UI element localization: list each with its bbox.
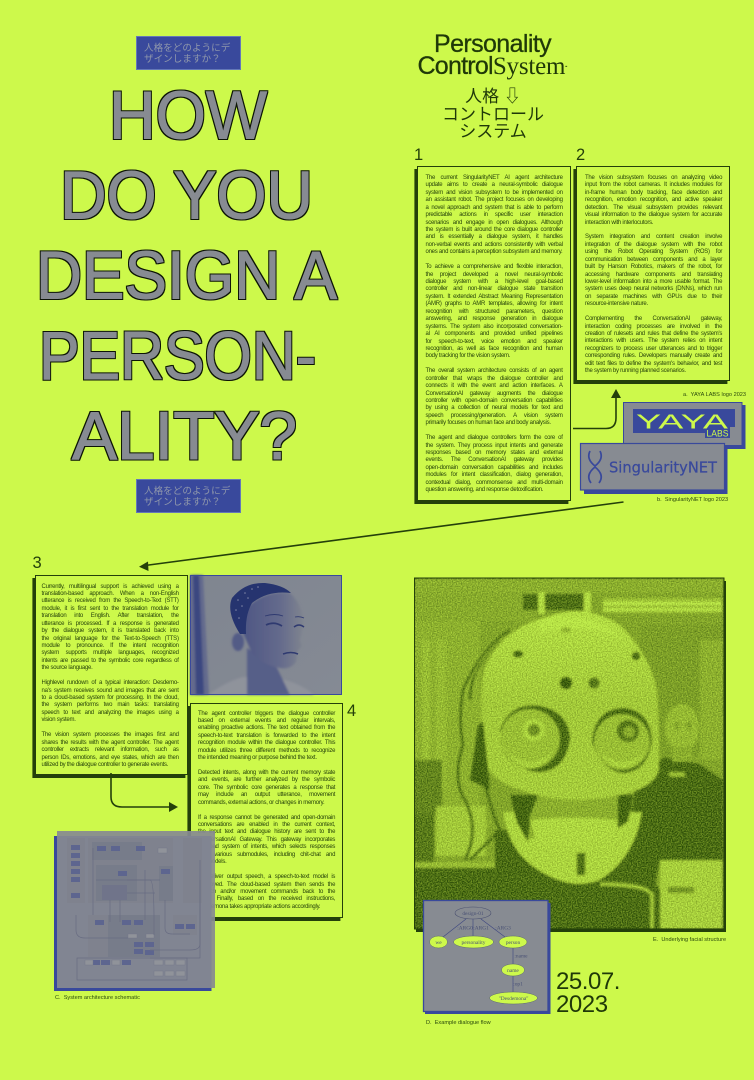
text block 3: The vision system processes the images first and (42, 732, 179, 738)
text block 2: accessing hardware components and translating (585, 272, 722, 278)
text block 1: ConversationAI gateway augments the dialogue (426, 391, 563, 397)
eyeballs (500, 709, 560, 769)
text block 2: edit text files to define the system's behavior, and test (585, 361, 722, 367)
text block 1: recognition with structured parameters, question (426, 309, 563, 315)
tag: Japanese subtitle top: ザインしますか？ (144, 54, 221, 65)
panel: text 3 (34, 575, 188, 774)
text block 2: interaction with interlocutors. (585, 220, 653, 226)
text block 2: system uses deep neural networks (DNNs), which run (585, 286, 722, 292)
date: 25.07. (556, 968, 620, 995)
wires (458, 630, 510, 860)
text block 4: employed. The cloud-based system then sends the (198, 882, 335, 888)
diagram: example dialogue flow: :ARG1 (473, 926, 489, 932)
number 2: 2 (576, 146, 585, 164)
text block 1: primarily focuses on human face and body analysis. (426, 420, 551, 426)
diagram: example dialogue flow: :ARG0 (457, 926, 473, 932)
text block 1: al AI components and provided unified pipelines (426, 331, 563, 337)
cranium (481, 611, 659, 800)
text block 3: translation-based approach. When a non-English (42, 591, 179, 597)
text block 1: the system. They process input intents and generate (426, 443, 563, 449)
title: how do you design a personality (36, 78, 338, 474)
tag: Japanese subtitle top: 人格をどのようにデ (144, 42, 230, 54)
text block 1: systems. The system also incorporated conversation- (426, 324, 563, 330)
text block 2: detection. The visual subsystem provides relevant (585, 205, 722, 211)
logo: YAYA LABS (623, 402, 746, 449)
text block 2: System integration and content creation involve (585, 234, 722, 240)
diagram: example dialogue flow: person (506, 940, 520, 946)
text block 1: non-verbal events and actions consistently with verbal (426, 242, 563, 248)
diagram: example dialogue flow: we (435, 940, 442, 946)
text block 1: controller with open-domain conversation capabilities (426, 398, 563, 404)
text block 4 (198, 710, 336, 910)
text block 3: speech to text and analyzing the images using a (42, 710, 179, 716)
diagram: system architecture schematic (54, 831, 215, 991)
panel: text 4 (190, 703, 342, 918)
hair cap (230, 583, 291, 634)
heading: Japanese system name: システム (459, 122, 527, 141)
jaw (503, 812, 642, 884)
text block 2: using the Robot Operating System (ROS) for (585, 249, 722, 255)
text block 1: and is essentially a dialogue system, it handles (426, 234, 563, 240)
date (556, 968, 620, 1018)
heading: Japanese system name: 人格 ⇩ (465, 87, 521, 106)
text block 3: Highlevel rundown of a typical interaction: Desdemo- (42, 680, 179, 686)
bottom dark bench (414, 862, 660, 929)
text block 4: ConversationAI Gateway. This gateway incorporates (198, 837, 335, 843)
logo: Personality Control System: ControlSystem- (418, 52, 567, 80)
text block 2 (585, 174, 722, 374)
text block 3: vision system. (42, 717, 76, 723)
text block 2: creation of rulesets and rules that define the system's (585, 331, 722, 337)
text block 2: input from the robot cameras. It includes modules for (585, 182, 722, 188)
diagram: example dialogue flow: :name (514, 954, 528, 960)
text block 2: Complementing the ConversationAI gateway, (585, 316, 722, 322)
text block 1: recognition, as well as face recognition and human (426, 346, 563, 352)
text block 1: ones and contains a perception subsystem and memory. (426, 249, 562, 255)
text block 1: controller that wraps the dialogue controller and (426, 376, 563, 382)
tag: Japanese subtitle bottom: ザインしますか？ (144, 497, 221, 508)
text block 4: module utilizes three different methods to recognize (198, 748, 335, 754)
text block 4: The agent controller triggers the dialogue controller (198, 710, 335, 716)
heading: Japanese system name: コントロール (442, 105, 544, 124)
text block 2: interaction coding processes are involved in the (585, 324, 722, 330)
background room (414, 578, 724, 593)
caption e: E. Underlying facial structure (653, 936, 726, 942)
diagram: example dialogue flow: personality (462, 940, 486, 946)
number 3: 3 (32, 554, 42, 572)
text block 3: module to pronounce. If the intent recognition (42, 643, 179, 649)
text block 4: core. The symbolic core generates a response that (198, 785, 335, 791)
text block 1: question answering, and response detoxification. (426, 487, 543, 493)
diagram: example dialogue flow: :op1 (513, 982, 523, 988)
text block 3: by the dialogue system, it is translated back into (42, 628, 179, 634)
date: 2023 (556, 991, 608, 1018)
number 4: 4 (347, 702, 356, 720)
photo: android portrait (188, 573, 342, 697)
diagram: example dialogue flow: design-01 (462, 911, 484, 917)
caption d: D. Example dialogue flow (426, 1020, 491, 1026)
text block 1: system and vision subsystem to be implemented on (426, 190, 563, 196)
text block 4: Detected intents, along with the current memory state (198, 770, 335, 776)
tag: Japanese subtitle bottom (136, 479, 240, 513)
text block 4: the intended meaning or purpose behind the text. (198, 755, 317, 761)
tag: Japanese subtitle top (136, 36, 240, 70)
arrow: box 1 to logos (573, 389, 621, 430)
text block 3: the system performs two main tasks: translating (42, 702, 179, 708)
text block 4: robot. Finally, based on the received instructions, (198, 896, 335, 902)
text block 1: predictable actions in specific user interaction (426, 212, 563, 218)
text block 3: intents are passed to the symbolic core regardless of (42, 658, 179, 664)
text block 4: To deliver output speech, a speech-to-text model is (198, 874, 335, 880)
text block 4: and events, are further analyzed by the symbolic (198, 777, 335, 783)
man behind (610, 757, 723, 925)
logo: SingularityNET (580, 442, 728, 494)
text block 4: enabling proactive actions. The text obtained from the (198, 725, 335, 731)
text block 4: speech and/or movement commands back to the (198, 889, 335, 895)
text block 4: from various submodules, including chit-chat and (198, 852, 335, 858)
text block 1: connects it with the event and action interfaces. A (426, 383, 563, 389)
text block 4: Desdemona takes appropriate actions accordingly. (198, 904, 320, 910)
text block 2: The vision subsystem focuses on analyzing video (585, 175, 722, 181)
text block 1: controller and non-linear dialogue state transition (426, 286, 563, 292)
diagram: example dialogue flow: name (507, 968, 519, 974)
text block 1 (426, 174, 563, 493)
text block 2: visual information to the dialogue system for accurate (585, 212, 722, 218)
text block 3: shares the results with the agent controller. The agent (42, 740, 179, 746)
text block 3: controller extracts relevant information, such as (42, 747, 179, 753)
text block 3: na's system receives sound and images that are sent (42, 688, 179, 694)
text block 4: a broad system of intents, which selects responses (198, 844, 335, 850)
text block 1: contextual dialog, commonsense and multi-domain (426, 480, 563, 486)
diagram: example dialogue flow: "Desdemona" (499, 996, 528, 1002)
skull holes (560, 677, 572, 689)
text block 3: translation into English. After translation, the (42, 613, 179, 619)
text block 1: speech processing/generation. A vision system (426, 413, 563, 419)
text block 3: to a cloud-based system for processing. In the cloud, (42, 695, 179, 701)
text block 4: conversations are enabled in the current context, (198, 822, 335, 828)
text block 1: responses based on memory states and external (426, 450, 563, 456)
text block 3: module, it is first sent to the translation module for (42, 606, 179, 612)
text block 2: built by Hanson Robotics, makers of the robot, for (585, 264, 722, 270)
text block 3: utilized by the dialogue controller to generate events. (42, 762, 168, 768)
text block 2: communication between components and a layer (585, 257, 722, 263)
sockets (500, 706, 570, 772)
text block 3: utterance is received from the Speech-to-Text (STT) (42, 598, 179, 604)
text block 2: interactions with users. The system relies on intent (585, 338, 722, 344)
text block 1: The agent and dialogue controllers form the core of (426, 435, 563, 441)
text block 1: scenarios and engage in open dialogues. Although (426, 220, 563, 226)
logo: Personality Control System (418, 30, 568, 80)
text block 3: Currently, multilingual support is achieved using a (42, 584, 179, 590)
mouth (512, 795, 635, 839)
arrow: to box 3 (139, 501, 624, 571)
logo: Personality Control System: Personality (434, 30, 551, 58)
text block 3: the original language for the Text-to-Speech (TTS) (42, 636, 179, 642)
text block 2: lower-level information into a more usable format. The (585, 279, 722, 285)
text block 2: recognizers to process user utterances and to trigger (585, 346, 722, 352)
tag: Japanese subtitle bottom: 人格をどのようにデ (144, 486, 230, 496)
text block 1: update aims to create a neural-symbolic dialogue (426, 182, 563, 188)
text block 2: the system by running planned scenarios. (585, 368, 686, 374)
text block 4: recognition module within the dialogue controller. This (198, 740, 335, 746)
text block 2: resource-intensive nature. (585, 301, 648, 307)
text block 2: integration of the dialogue system with the robot (585, 242, 722, 248)
text block 1: (AMR) graphs to AMR templates, allowing for intent (426, 301, 563, 307)
caption a: a. YAYA LABS logo 2023 (683, 392, 746, 398)
text block 2: on separate machines with GPUs due to their (585, 294, 722, 300)
text block 1: system. It extended Abstract Meaning Representation (426, 294, 563, 300)
diagram: example dialogue flow (422, 900, 550, 1014)
text block 4: If a response cannot be generated and open-domain (198, 815, 335, 821)
title: how do you design a personality: DESIGN A (36, 238, 337, 314)
heading: Japanese system name (442, 87, 544, 141)
logo: YAYA LABS: YAYA (636, 410, 729, 434)
title: how do you design a personality: PERSON- (39, 319, 316, 394)
text block 4: the input text and dialogue history are sent to the (198, 829, 335, 835)
arrow: box 3 to box 4 (110, 773, 178, 812)
diagram: example dialogue flow: :ARG3 (495, 926, 511, 932)
text block 1: open-domain conversation capabilities and includes (426, 465, 563, 471)
text block 2: recognition, emotion recognition, and active speaker (585, 197, 722, 203)
text block 1: answering, and response generation in dialogue (426, 316, 563, 322)
photo: robot skull underlying facial structure (414, 578, 726, 932)
text block 4: based on external events and regular intervals, (198, 718, 335, 724)
top fixtures (523, 594, 583, 610)
text block 4: commands, external actions, or changes in memory. (198, 800, 324, 806)
text block 1: events. The ConversationAI gateway provides (426, 457, 563, 463)
title: how do you design a personality: DO YOU (60, 158, 313, 234)
text block 4: QA models. (198, 859, 227, 865)
caption c: C. System architecture schematic (55, 995, 140, 1001)
text block 1: the project developed a novel neural-symbolic (426, 272, 563, 278)
text block 1: an assistant robot. The project focuses on developing (426, 197, 563, 203)
text block 3: system supports multiple languages, recognized (42, 650, 179, 656)
panel: text 2 (576, 166, 730, 381)
text block 1: To achieve a comprehensive and flexible interaction, (426, 264, 563, 270)
text block 2: in-frame human body tracking, face detection and (585, 190, 722, 196)
title: how do you design a personality: HOW (109, 78, 267, 154)
text block 1: for speech-to-text, voice emotion and speaker (426, 338, 563, 344)
text block 3 (42, 584, 179, 768)
logo: SingularityNET: SingularityNET (609, 460, 718, 476)
text block 1: The current SingularityNET AI agent architecture (426, 175, 563, 181)
neck shadows (495, 830, 530, 875)
text block 2: corresponding rules. Developers manually create and (585, 353, 722, 359)
number 1: 1 (414, 146, 423, 164)
text block 1: dialogue system with a high-level goal-based (426, 279, 563, 285)
panel: text 1 (417, 166, 571, 500)
text block 1: by using a collection of neural models for text and (426, 405, 563, 411)
caption b: b. SingularityNET logo 2023 (657, 497, 728, 503)
text block 1: modules for intent classification, dialog generation, (426, 472, 563, 478)
text block 4: may include an output utterance, movement (198, 792, 335, 798)
text block 1: body tracking for the vision system. (426, 353, 510, 359)
title: how do you design a personality: ALITY? (72, 399, 297, 474)
text block 4: speech-to-text translation is forwarded to the intent (198, 733, 335, 739)
text block 3: utterance is processed. If a response is generated (42, 621, 179, 627)
text block 1: a novel approach and system that is able to perform (426, 205, 563, 211)
text block 3: person IDs, emotions, and eye states, which are then (42, 755, 179, 761)
text block 1: The overall system architecture consists of an agent (426, 368, 563, 374)
text block 3: the source language. (42, 665, 93, 671)
text block 1: the system is built around the core dialogue controller (426, 227, 563, 233)
logo: YAYA LABS: LABS (706, 428, 728, 438)
